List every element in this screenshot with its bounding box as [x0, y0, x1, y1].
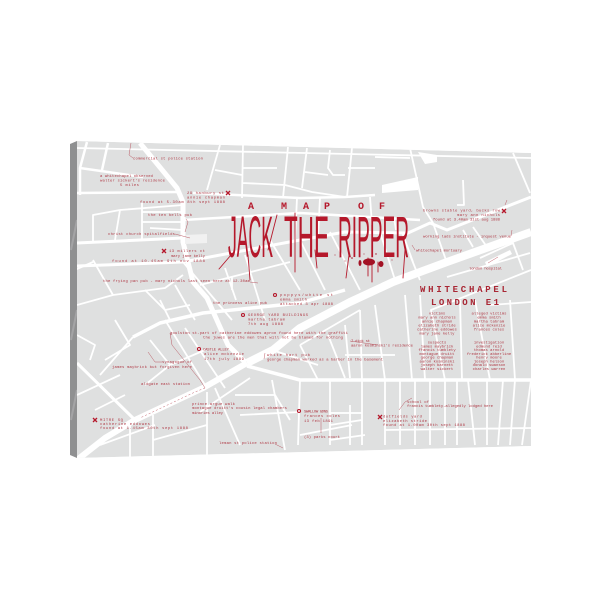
list: suspects: francis tumblety	[418, 348, 456, 353]
label: frying pan: the frying pan pub - mary nichols last seen here at 12.30am	[103, 279, 251, 284]
label: dutfields yard	[383, 414, 466, 428]
label: white hart: white hart pub	[267, 353, 311, 358]
label: mitre square: MITRE SQ	[100, 419, 124, 423]
heading: whitechapel london e1: WHITECHAPEL	[420, 285, 507, 295]
list: suspects	[418, 342, 456, 372]
label: parks court: (3) parks court	[304, 435, 340, 440]
label: browns stable yard	[423, 208, 501, 222]
list: suspects: james maybrick	[421, 344, 454, 350]
list: victims: elizabeth stride	[418, 324, 456, 328]
label: mitre square: found at 1.45am 30th sept 1888	[100, 426, 189, 431]
label: christ church: christ church spitalfields	[108, 232, 176, 237]
blood splatter	[334, 253, 392, 267]
list: investigation: charles warren	[473, 367, 505, 372]
title: jack the ripper: THE	[284, 205, 329, 270]
list: alleged victims: alice mckenzie	[473, 324, 506, 328]
label: princess alice: the princess alice pub	[213, 301, 268, 306]
list: investigation: donald swanson	[473, 363, 505, 368]
label: druitt chambers: prince argue walk	[192, 402, 236, 407]
label: bucks row: attacked 3 apr 1888	[280, 302, 334, 307]
label: tumblety: francis tumblety-allegedly lodged here	[407, 404, 494, 409]
location labels	[100, 156, 512, 446]
list: suspects: george chapman	[421, 356, 453, 360]
label: residence: a whitechapel observed	[100, 174, 153, 179]
label: goulston street	[170, 331, 349, 340]
label: bucks row: poppys/white st	[280, 293, 333, 298]
label: police station: commercial st police station	[133, 156, 203, 162]
label: druitt chambers	[192, 402, 288, 416]
heading: whitechapel london e1	[420, 285, 507, 308]
label: residence: 5 miles	[120, 183, 140, 188]
label: castle alley: 17th july 1889	[204, 357, 245, 362]
label: kosminski: 7 dick st	[351, 339, 370, 344]
label: george yard: martha tabram	[248, 318, 286, 322]
label: castle alley: CASTLE ALLEY	[203, 348, 230, 352]
label: tumblety	[407, 400, 494, 409]
label: tumblety: school of	[407, 400, 430, 405]
label: residence	[100, 174, 166, 188]
label: aldgate east: aldgate east station	[141, 382, 190, 387]
list: suspects: walter sickert	[421, 367, 453, 372]
label: leman street: leman st police station	[219, 441, 277, 446]
label: druitt chambers: minories alley	[192, 411, 224, 416]
list: investigation: frederick abberline	[467, 352, 512, 357]
label: dutfields yard: dutfields yard	[383, 414, 422, 420]
title: a map of: AMAPOF	[248, 202, 385, 213]
list: victims: mary ann nichols	[418, 316, 456, 320]
label: goulston street: the juwes are the men that will not be blamed for nothing	[203, 336, 343, 340]
label: hanbury street	[140, 191, 226, 205]
label: london hospital: london hospital	[469, 266, 503, 272]
list: alleged victims: martha tabram	[474, 320, 505, 324]
minor roads	[70, 145, 531, 460]
markers: murder sites	[93, 191, 506, 422]
list: alleged victims: frances coles	[474, 328, 505, 332]
label: millers court	[112, 249, 206, 264]
title: jack the ripper: JACK	[228, 205, 273, 270]
markers: attack sites	[198, 294, 300, 412]
list: investigation: henry moore	[476, 356, 503, 360]
label: ten bells: the ten bells pub	[148, 213, 193, 218]
heading: whitechapel london e1: LONDON E1	[431, 298, 500, 308]
label: synagogue: james maybrick but forgiven here	[112, 365, 193, 370]
label: hanbury street: annie chapman	[187, 196, 225, 200]
label: millers court: 13 millers ct	[169, 249, 205, 254]
label: hanbury street: 29 hanbury st	[187, 191, 224, 196]
label: browns stable yard: found at 3.40am 31st aug 1888	[433, 218, 501, 222]
label: mitre square: catherine eddowes	[100, 422, 151, 427]
canvas side edge	[70, 141, 77, 458]
label: white hart	[267, 353, 383, 362]
list: suspects: aaron kosminski	[419, 360, 455, 364]
spitalfields white block	[185, 234, 207, 244]
label: browns stable yard: browns stable yard, bucks row	[423, 208, 501, 214]
lists of names	[417, 312, 512, 372]
label: swallow gardens: frances coles	[304, 414, 341, 419]
label: synagogue	[112, 360, 193, 370]
hospital and yard white blocks	[382, 152, 512, 267]
list: suspects: joseph barnett	[421, 363, 453, 368]
major roads	[77, 142, 531, 460]
list: alleged victims	[471, 312, 507, 332]
label: bucks row	[280, 293, 334, 307]
label: mortuary: whitechapel mortuary	[416, 248, 463, 254]
label: dutfields yard: elizabeth stride	[383, 419, 428, 424]
label: white hart: george chapman worked as a barber in the basement	[267, 358, 383, 362]
list: victims	[417, 312, 458, 336]
list: investigation: investigation	[474, 340, 504, 346]
label: swallow gardens: 13 feb 1891	[304, 419, 334, 424]
label: george yard: GEORGE YARD BUILDINGS	[248, 314, 309, 318]
label: george yard	[248, 314, 309, 327]
list: victims: annie chapman	[422, 320, 452, 324]
list: victims: victims	[429, 312, 446, 316]
map	[70, 141, 531, 460]
title: jack the ripper	[219, 205, 409, 282]
leader lines	[129, 143, 512, 448]
label: dutfields yard: found at 1.00am 30th sept 1888	[383, 423, 466, 428]
list: victims: catherine eddowes	[417, 328, 458, 332]
list: suspects: suspects	[428, 342, 447, 346]
label: swallow gardens	[304, 410, 341, 424]
list: victims: mary jane kelly	[419, 332, 455, 336]
label: goulston street: goulston st-part of catherine eddowes apron found here with the graffiti	[170, 331, 349, 336]
label: mitre square	[100, 419, 189, 431]
list: investigation: thomas arnold	[474, 348, 504, 353]
text: RIPPER	[338, 205, 409, 270]
label: swallow gardens: SWALLOW GDNS	[304, 410, 329, 414]
list: alleged victims: alleged victims	[471, 312, 507, 316]
label: kosminski	[351, 339, 414, 348]
label: residence: walter sickert's residence	[100, 178, 166, 184]
list: investigation: edmund reid	[476, 344, 502, 350]
label: george yard: 7th aug 1888	[248, 322, 284, 327]
list: alleged victims: emma smith	[477, 316, 501, 320]
label: browns stable yard: mary ann nichols	[457, 213, 501, 218]
list: suspects: montague druitt	[419, 352, 455, 357]
list: investigation: joseph helson	[474, 360, 504, 364]
label: castle alley	[203, 348, 245, 362]
label: millers court: mary jane kelly	[171, 254, 206, 259]
list: investigation	[467, 340, 512, 372]
label: castle alley: alice mckenzie	[204, 352, 245, 357]
label: working lads institute: working lads institute - inquest venue	[423, 234, 512, 240]
label: synagogue: synagogue of	[162, 360, 193, 365]
label: druitt chambers: montague druitt's cousin legal chambers	[192, 406, 288, 411]
label: hanbury street: found at 5.30am 8th sept 1888	[140, 200, 226, 205]
label: millers court: found at 10.45am 9th nov 1888	[112, 259, 206, 264]
label: kosminski: aaron kosminski's residence	[351, 344, 414, 348]
label: bucks row: emma smith	[280, 298, 307, 302]
